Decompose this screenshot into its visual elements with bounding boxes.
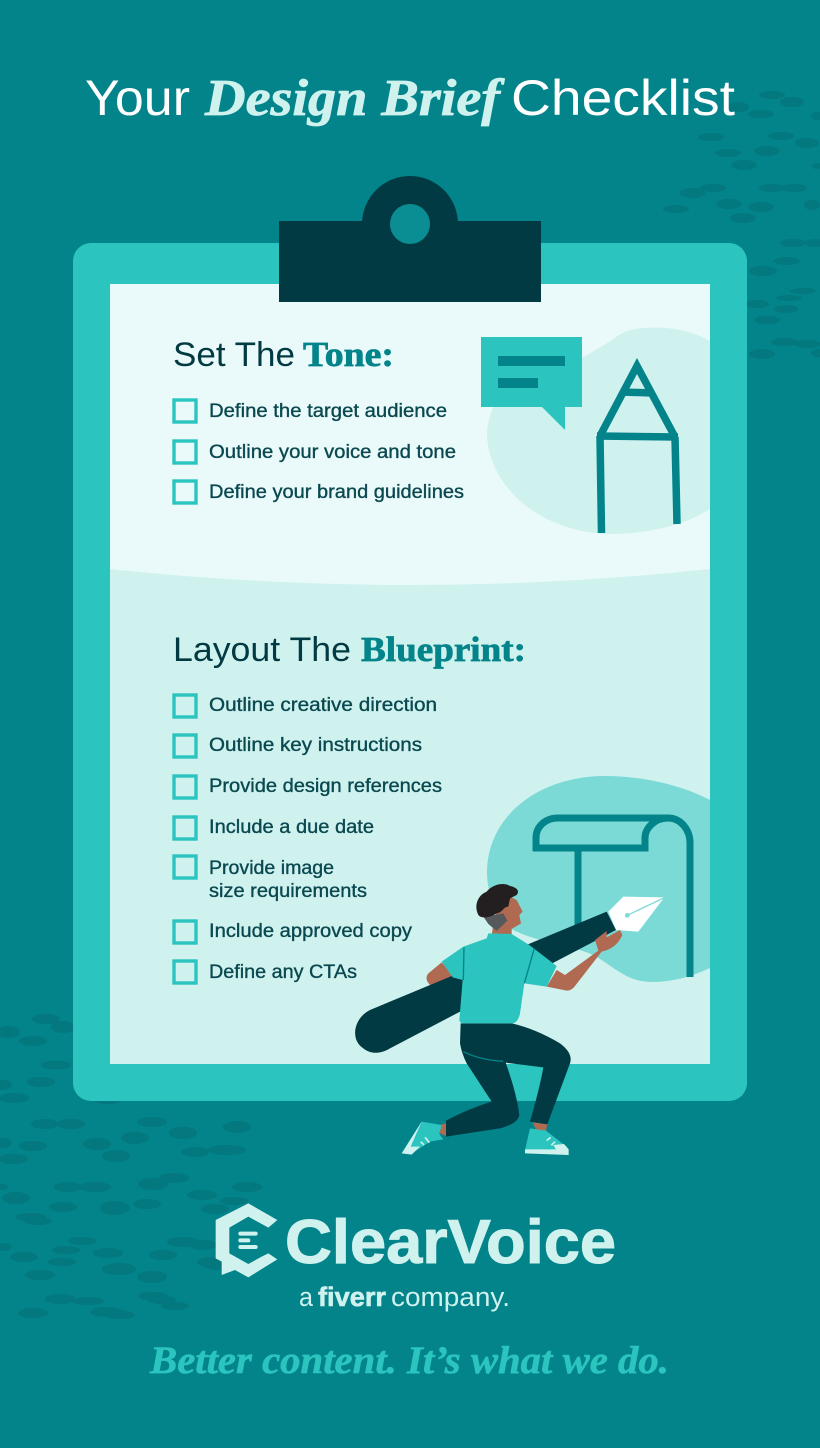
checklist: blueprint: Outline key instructions (209, 735, 422, 756)
left arm (427, 962, 455, 985)
logo: clearvoice (216, 1203, 616, 1312)
checklist: blueprint (174, 695, 442, 983)
illustration: person carrying giant pen (355, 884, 664, 1155)
slogan: Better content. It’s what we do. (149, 1339, 669, 1382)
giant pen nib (608, 897, 664, 932)
checklist: tone: Outline your voice and tone (209, 442, 456, 463)
logo tagline: a (299, 1282, 314, 1312)
logo tagline: company. (391, 1282, 510, 1312)
heading: layout the blueprint: Blueprint: (361, 630, 526, 669)
title: Design Brief (204, 70, 505, 127)
ankles (439, 1122, 547, 1136)
paper top section (110, 284, 710, 604)
checklist: blueprint: Provide image (209, 858, 334, 879)
logo tagline: fiverr (318, 1282, 386, 1312)
logo tagline (299, 1282, 510, 1312)
checklist: blueprint: Include approved copy (209, 921, 413, 942)
logo icon (216, 1203, 277, 1277)
title (85, 70, 735, 127)
right arm (547, 930, 622, 991)
title: Your (85, 70, 190, 126)
hair (476, 884, 518, 917)
heading: set the tone: Tone: (303, 335, 394, 374)
checklist: tone: Define your brand guidelines (209, 482, 464, 503)
clipboard board (73, 243, 747, 1101)
heading: set the tone (173, 335, 394, 374)
paper bottom section (110, 569, 710, 1064)
checklist: blueprint: Provide design references (209, 776, 442, 797)
checklist: blueprint: Define any CTAs (209, 962, 357, 983)
clipboard clip (279, 176, 541, 302)
heading: layout the blueprint: Layout The (173, 631, 351, 669)
heading: set the tone: Set The (173, 336, 295, 374)
legs (446, 1023, 571, 1137)
checklist: tone (174, 400, 464, 503)
shirt (442, 933, 557, 1023)
giant pen body (355, 912, 616, 1053)
checklist: blueprint: size requirements (209, 881, 367, 902)
heading: layout the blueprint (173, 630, 526, 669)
title: Checklist (511, 70, 735, 126)
logo wordmark: ClearVoice (285, 1208, 616, 1277)
illustration: scroll (487, 776, 710, 982)
undercut (483, 913, 507, 931)
checklist: blueprint: Include a due date (209, 817, 374, 838)
neck and head (492, 895, 523, 936)
right shoe (525, 1128, 569, 1155)
left shoe (402, 1122, 443, 1155)
checklist: tone: Define the target audience (209, 401, 447, 422)
checklist: blueprint: Outline creative direction (209, 695, 437, 716)
illustration: pencil and speech bubble (481, 328, 710, 534)
